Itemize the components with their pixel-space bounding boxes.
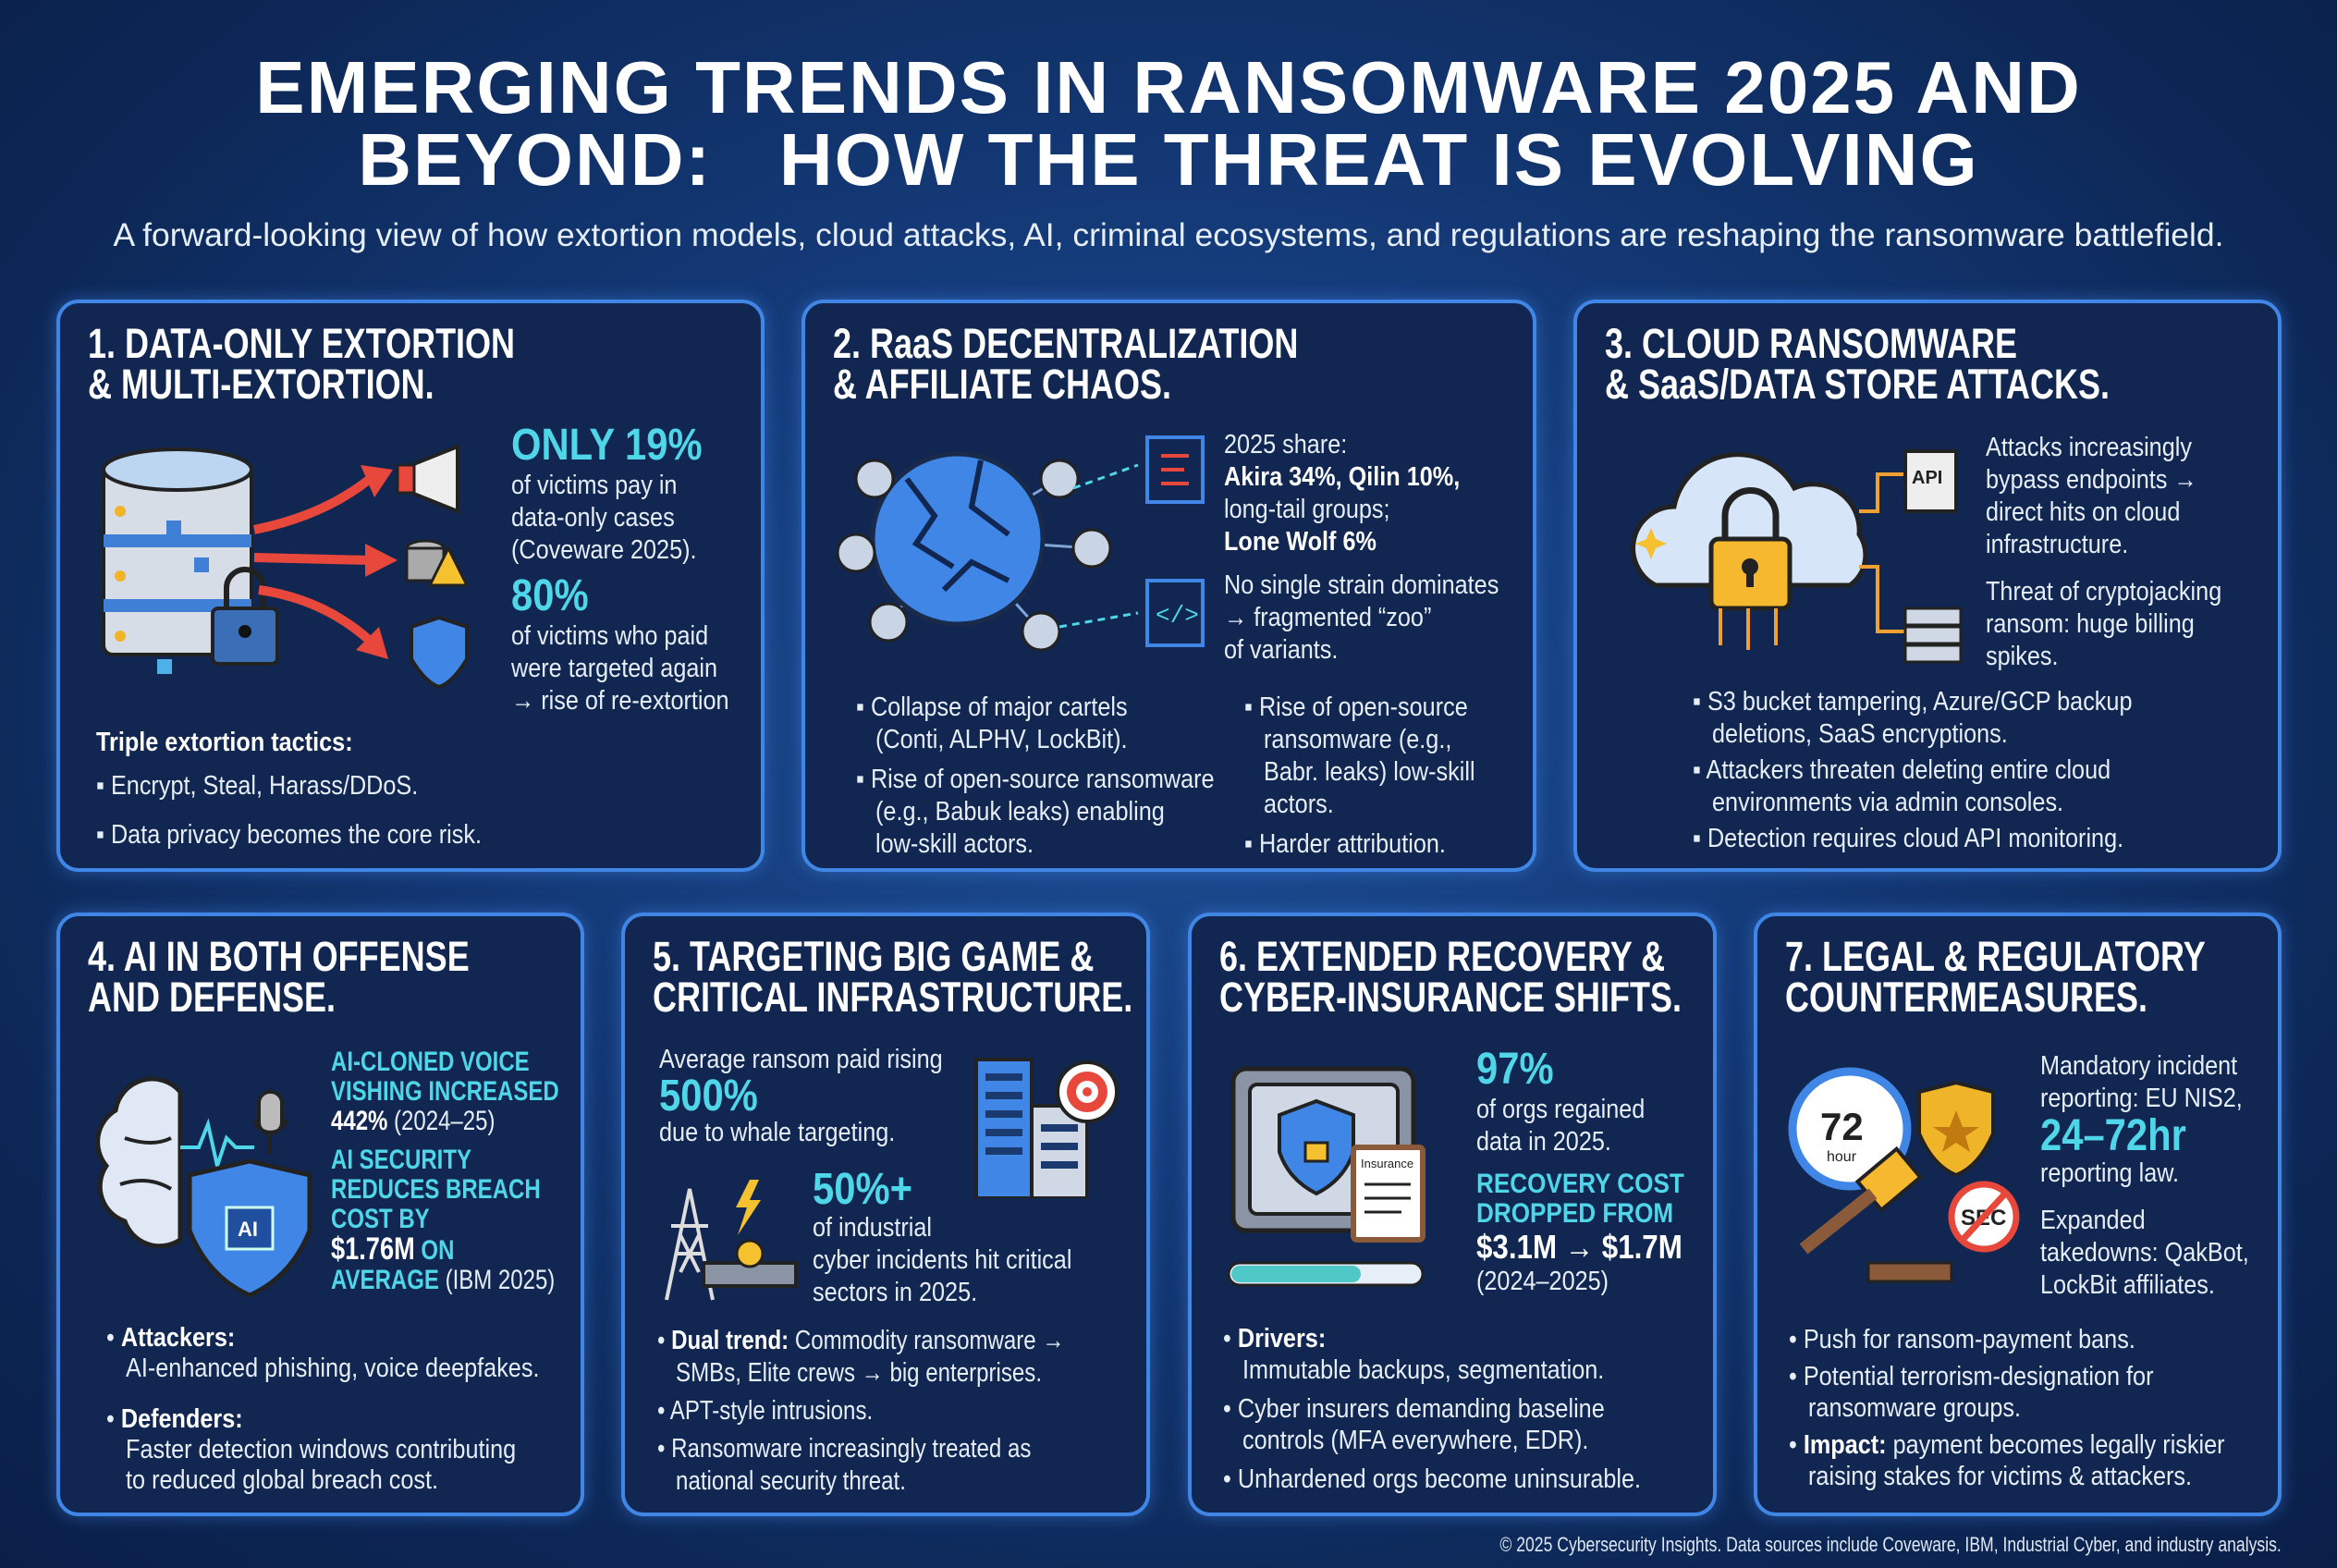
bullets right (1244, 692, 1475, 859)
heading 1: 1. DATA-ONLY EXTORTION (88, 320, 515, 367)
bullets (1223, 1324, 1641, 1494)
bullets: raising stakes for victims & attackers. (1808, 1462, 2192, 1491)
text: attacks bypass: Attacks increasingly (1986, 433, 2192, 462)
text: mandatory reporting: LockBit affiliates. (2040, 1270, 2215, 1300)
heading 6: CYBER-INSURANCE SHIFTS. (1219, 974, 1682, 1021)
panel: 3 cloud ransomware (1573, 300, 2282, 872)
heading 5: CRITICAL INFRASTRUCTURE. (653, 974, 1132, 1021)
icon: AI brain shield (95, 1076, 312, 1298)
stats: AI (331, 1047, 559, 1295)
stats: AI: AI SECURITY (331, 1145, 471, 1175)
bullets right: ransomware (e.g., (1264, 725, 1451, 754)
bullets: deletions, SaaS encryptions. (1712, 719, 2008, 749)
bullets: ransomware groups. (1808, 1393, 2021, 1423)
stat: 50%+: of industrial (813, 1213, 932, 1243)
bullets: ▪ Attackers threaten deleting entire cloud (1693, 755, 2111, 785)
heading 5: 5. TARGETING BIG GAME & (653, 933, 1094, 980)
bullets: SMBs, Elite crews → big enterprises. (676, 1358, 1042, 1388)
title (255, 46, 2082, 201)
stat: only 19%: were targeted again (511, 654, 717, 683)
heading 7: 7. LEGAL & REGULATORY (1785, 933, 2206, 980)
bullets left: (e.g., Babuk leaks) enabling (875, 797, 1165, 827)
heading 2: & AFFILIATE CHAOS. (833, 361, 1171, 408)
text: attacks bypass: infrastructure. (1986, 530, 2128, 559)
stats: AI: AI-CLONED VOICE (331, 1047, 530, 1077)
icon: clock gavel badge: 72 (1820, 1105, 1864, 1148)
text: mandatory reporting: Expanded (2040, 1206, 2146, 1235)
text: 2025 share: of variants. (1224, 635, 1338, 665)
icon: safe with insurance (1228, 1067, 1425, 1287)
icon: fractured globe network (836, 435, 1205, 651)
stats: AI: 442% (2024–25) (331, 1106, 495, 1136)
bullets (1789, 1325, 2225, 1491)
text: 2025 share (1224, 430, 1499, 665)
title: BEYOND: HOW THE THREAT IS EVOLVING (358, 118, 1979, 201)
heading 5 (653, 933, 1132, 1021)
stats: $3.1M → $1.7M (1476, 1228, 1682, 1266)
heading 2 (833, 320, 1298, 408)
heading 4 (88, 933, 470, 1021)
bullets: environments via admin consoles. (1712, 788, 2063, 817)
stat: only 19%: data-only cases (511, 503, 675, 533)
panel: 6 recovery (1188, 913, 1717, 1516)
stats: of orgs regained (1476, 1095, 1645, 1124)
heading 3: 3. CLOUD RANSOMWARE (1605, 320, 2017, 367)
text: triple extortion: Triple extortion tactics: (96, 728, 353, 757)
text: mandatory reporting: takedowns: QakBot, (2040, 1238, 2249, 1268)
icon: clock gavel badge (1788, 1067, 2019, 1283)
text: 2025 share: Akira 34%, Qilin 10%, (1224, 462, 1460, 492)
title: EMERGING TRENDS IN RANSOMWARE 2025 AND (255, 46, 2082, 129)
bullets right: Babr. leaks) low-skill (1264, 757, 1475, 787)
icon: building target (974, 1058, 1119, 1198)
stats: data in 2025. (2024–2025) (1476, 1127, 1611, 1296)
stat: 50%+: 50%+ (813, 1165, 912, 1214)
stats: DROPPED FROM (1476, 1198, 1673, 1229)
stat: 50%+: sectors in 2025. (813, 1278, 977, 1307)
heading 1 (88, 320, 515, 408)
bullets: • Attackers: (106, 1323, 235, 1353)
stat: only 19%: (Coveware 2025). of victims who paid (511, 535, 708, 651)
stat: only 19%: 80% (511, 571, 589, 620)
footer: © 2025 Cybersecurity Insights. Data sources include Coveware, IBM, Industrial Cyber, and industry analysis. (1500, 1533, 2282, 1556)
icon: clock gavel badge: SEC (1961, 1206, 2006, 1231)
text: attacks bypass: spikes. (1986, 642, 2059, 671)
stat: 50%+ (813, 1165, 1071, 1307)
panel: 5 big game (621, 913, 1150, 1516)
bullets left (856, 692, 1215, 859)
text: average ransom: Average ransom paid rising due to whale targeting. (659, 1045, 943, 1147)
stats: AI: REDUCES BREACH (331, 1174, 541, 1205)
heading 1: & MULTI-EXTORTION. (88, 361, 434, 408)
bullets: • Dual trend: Commodity ransomware → (657, 1326, 1064, 1355)
bullets: • Defenders: (106, 1404, 243, 1434)
icon: cloud with lock (1631, 449, 1962, 664)
bullets left: low-skill actors. (875, 829, 1034, 859)
bullets: • Cyber insurers demanding baseline (1223, 1394, 1605, 1424)
bullets: • Unhardened orgs become uninsurable. (1223, 1464, 1641, 1494)
bullets: Immutable backups, segmentation. (1242, 1355, 1604, 1385)
stat: 50%+: cyber incidents hit critical (813, 1245, 1071, 1275)
stat: only 19%: of victims pay in (511, 471, 677, 500)
text: mandatory reporting: Mandatory incident (2040, 1051, 2237, 1081)
bullets left: (Conti, ALPHV, LockBit). (875, 725, 1128, 754)
subtitle: A forward-looking view of how extortion models, cloud attacks, AI, criminal ecosystems, and regulations are reshaping the ransomware battlefield. (113, 216, 2224, 253)
bullets right: ▪ Rise of open-source (1244, 692, 1468, 722)
panel: 7 legal (1754, 913, 2282, 1516)
bullets: national security threat. (676, 1466, 906, 1496)
heading 3: & SaaS/DATA STORE ATTACKS. (1605, 361, 2110, 408)
icon: fractured globe network: </> (1156, 602, 1199, 630)
heading 3 (1605, 320, 2110, 408)
text: attacks bypass: ransom: huge billing (1986, 609, 2195, 639)
stats: AI: AVERAGE (IBM 2025) (331, 1265, 555, 1295)
heading 6 (1219, 933, 1682, 1021)
bullets (1693, 687, 2132, 853)
text: mandatory reporting (2040, 1051, 2249, 1300)
text: attacks bypass (1986, 433, 2221, 671)
stats: AI: VISHING INCREASED (331, 1076, 559, 1107)
bullets: ▪ S3 bucket tampering, Azure/GCP backup (1693, 687, 2132, 717)
heading 4: AND DEFENSE. (88, 974, 336, 1021)
stat: only 19%: → rise of re-extortion (511, 686, 729, 716)
heading 6: 6. EXTENDED RECOVERY & (1219, 933, 1665, 980)
stats: RECOVERY COST (1476, 1169, 1684, 1199)
stats (1476, 1045, 1684, 1296)
bullets: • Potential terrorism-designation for (1789, 1362, 2153, 1391)
icon: clock gavel badge: hour (1827, 1149, 1857, 1165)
bullets: to reduced global breach cost. (126, 1465, 438, 1495)
text: triple extortion (96, 728, 482, 850)
icon: AI brain shield: AI (238, 1218, 258, 1241)
icon: power tower pipe (665, 1180, 798, 1300)
panel: 4 AI (56, 913, 584, 1516)
heading 4: 4. AI IN BOTH OFFENSE (88, 933, 470, 980)
bullets: controls (MFA everywhere, EDR). (1242, 1426, 1588, 1455)
bullets: • Drivers: (1223, 1324, 1326, 1354)
icon: cloud with lock: API (1912, 468, 1942, 488)
text: triple extortion: ▪ Encrypt, Steal, Harass/DDoS. (96, 771, 418, 801)
bullets: • Ransomware increasingly treated as (657, 1434, 1031, 1464)
text: attacks bypass: bypass endpoints → (1986, 465, 2197, 495)
bullets right: actors. (1264, 790, 1334, 819)
text: 2025 share: long-tail groups; (1224, 495, 1390, 524)
text: 2025 share: 2025 share: (1224, 430, 1347, 459)
text: 2025 share: → fragmented “zoo” (1224, 603, 1431, 632)
bullets: • Impact: payment becomes legally riskier (1789, 1430, 2225, 1460)
bullets: • Push for ransom-payment bans. (1789, 1325, 2135, 1354)
icon: database with arrows (102, 444, 470, 689)
bullets: ▪ Detection requires cloud API monitoring. (1693, 824, 2123, 853)
panel: 2 RaaS (801, 300, 1536, 872)
bullets: AI-enhanced phishing, voice deepfakes. (126, 1354, 539, 1383)
bullets left: ▪ Collapse of major cartels (856, 692, 1128, 722)
text: mandatory reporting: reporting: EU NIS2, reporting law. (2040, 1084, 2243, 1188)
stat: only 19% (511, 421, 729, 716)
heading 2: 2. RaaS DECENTRALIZATION (833, 320, 1298, 367)
bullets: • APT-style intrusions. (657, 1396, 873, 1426)
heading 7 (1785, 933, 2206, 1021)
text: triple extortion: ▪ Data privacy becomes the core risk. (96, 820, 482, 850)
stats: 97% (1476, 1045, 1554, 1094)
stat: only 19%: ONLY 19% (511, 421, 703, 470)
text: 2025 share: No single strain dominates (1224, 570, 1499, 600)
text: mandatory reporting: 24–72hr (2040, 1111, 2186, 1160)
bullets (106, 1323, 539, 1495)
bullets (657, 1326, 1064, 1496)
text: attacks bypass: Threat of cryptojacking (1986, 577, 2221, 606)
stats: AI: COST BY (331, 1204, 430, 1234)
panel: 1 data-only extortion (56, 300, 765, 872)
text: 2025 share: Lone Wolf 6% (1224, 527, 1377, 557)
bullets left: ▪ Rise of open-source ransomware (856, 765, 1215, 794)
text: average ransom: 500% (659, 1072, 758, 1121)
heading 7: COUNTERMEASURES. (1785, 974, 2147, 1021)
text: attacks bypass: direct hits on cloud (1986, 497, 2180, 527)
stats: AI: $1.76M ON (331, 1231, 454, 1267)
icon: safe with insurance: Insurance (1361, 1157, 1413, 1170)
bullets right: ▪ Harder attribution. (1244, 829, 1446, 859)
bullets: Faster detection windows contributing (126, 1435, 516, 1464)
